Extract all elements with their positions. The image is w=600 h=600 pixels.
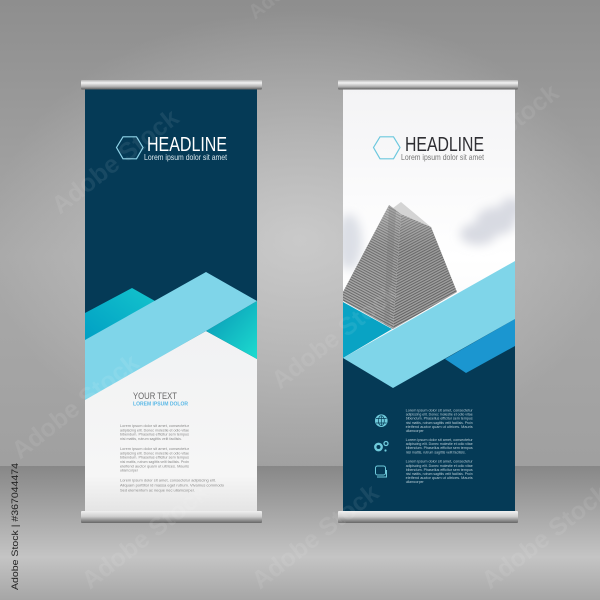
stock id caption: Adobe Stock | #367044474 [10,463,21,590]
paragraph one: nisi mattis, rutrum sagittis velit facilisis. [120,436,182,441]
your text heading: YOUR TEXT [133,391,177,401]
paragraph two: ullamcorper [120,468,139,473]
paragraph two: nisi mattis, rutrum sagittis velit facilisis. [406,450,466,454]
right teal shape [206,301,257,359]
icon: globe [375,414,388,427]
paragraph one [406,408,473,433]
paragraph two [120,446,190,473]
paragraph three: adipiscing elit. Donec molestie et odio vitae [406,464,473,468]
sub headline: Lorem ipsum dolor sit amet [144,152,228,162]
right banner bottom rail [338,511,518,523]
paragraph three: bibendum. Phasellus efficitur sem tempus [406,468,473,472]
hexagon outline [374,137,400,159]
paragraph one: adipiscing elit. Donec molestie et odio vitae [406,413,473,417]
light blue diagonal band [85,272,257,400]
panel: left banner [85,88,257,512]
left banner dark background [85,88,257,512]
paragraph one: nisi mattis, rutrum sagittis velit facilisis. Proin [406,421,473,425]
cloud right [460,198,524,245]
blue subheading: LOREM IPSUM DOLOR [133,402,188,408]
paragraph three: nisi mattis, rutrum sagittis velit facilisis. Proin [406,472,473,476]
stock watermarks: Adobe Stock [426,79,564,195]
paragraph one: Lorem ipsum dolor sit amet, consectetur [120,423,190,428]
sky background [343,88,515,512]
paragraph three: eleifend auctor quam ut ultrices. Mauris [406,476,473,480]
left teal shape [85,288,155,341]
left banner bottom rail [81,511,262,523]
paragraph two: Lorem ipsum dolor sit amet, consectetur [120,446,190,451]
sub headline: Lorem ipsum dolor sit amet [401,152,485,162]
headline: HEADLINE [405,134,484,156]
stock watermarks: Adobe Stock [266,279,404,395]
panel: right banner [336,88,524,512]
icon: chat [376,466,386,477]
paragraph one: adipiscing elit. Donec molestie et odio vitae [120,427,189,432]
blue right shape [445,319,515,373]
background: studio wall [0,0,600,470]
paragraph three: Lorem ipsum dolor sit amet, consectetur adipiscing elit. [120,478,216,482]
paragraph two: bibendum. Phasellus efficitur sem tempus [406,446,473,450]
paragraph one: Lorem ipsum dolor sit amet, consectetur [406,408,473,412]
teal left shape [343,302,392,358]
paragraph three: Sed elementum ac neque nec ullamcorper. [120,488,195,492]
paragraph three [120,478,225,492]
skyscraper [343,202,457,329]
icon: gears [375,442,388,452]
stock watermarks: Adobe Stock [46,104,184,220]
light blue diagonal band [343,261,515,388]
left banner white lower area [85,331,257,512]
paragraph three: Lorem ipsum dolor sit amet, consectetur [406,460,473,464]
dark lower area [343,319,515,512]
right banner top rail [338,80,518,90]
paragraph three: ullamcorper [406,480,424,484]
stock watermarks: Adobe Stock [246,479,384,595]
hexagon outline [116,137,143,159]
cloud left [343,212,365,272]
paragraph two: eleifend auctor quam ut ultrices. Mauris [120,463,189,468]
left banner top rail [81,80,262,90]
paragraph two: bibendum. Phasellus efficitur sem tempus [120,455,189,460]
paragraph one: bibendum. Phasellus efficitur sem tempus [406,417,473,421]
paragraph two: Lorem ipsum dolor sit amet, consectetur [406,438,473,442]
background: floor [0,466,600,600]
stock watermarks: Adobe Stock [76,479,214,595]
paragraph one: eleifend auctor quam ut ultrices. Mauris [406,425,473,429]
paragraph one: bibendum. Phasellus efficitur sem tempus [120,432,189,437]
paragraph two [406,438,473,454]
paragraph one: ullamcorper [406,429,424,433]
paragraph three [406,460,473,484]
paragraph three: Aliquam porttitor id massa eget rutrum. Vivamus commodo [120,482,225,488]
paragraph one [120,423,190,441]
headline: HEADLINE [147,134,227,156]
paragraph two: adipiscing elit. Donec molestie et odio vitae [120,450,189,455]
paragraph two: nisi mattis, rutrum sagittis velit facilisis. Proin [120,459,189,464]
stock watermarks: Adobe Stock [6,349,144,465]
paragraph two: adipiscing elit. Donec molestie et odio vitae [406,442,473,446]
